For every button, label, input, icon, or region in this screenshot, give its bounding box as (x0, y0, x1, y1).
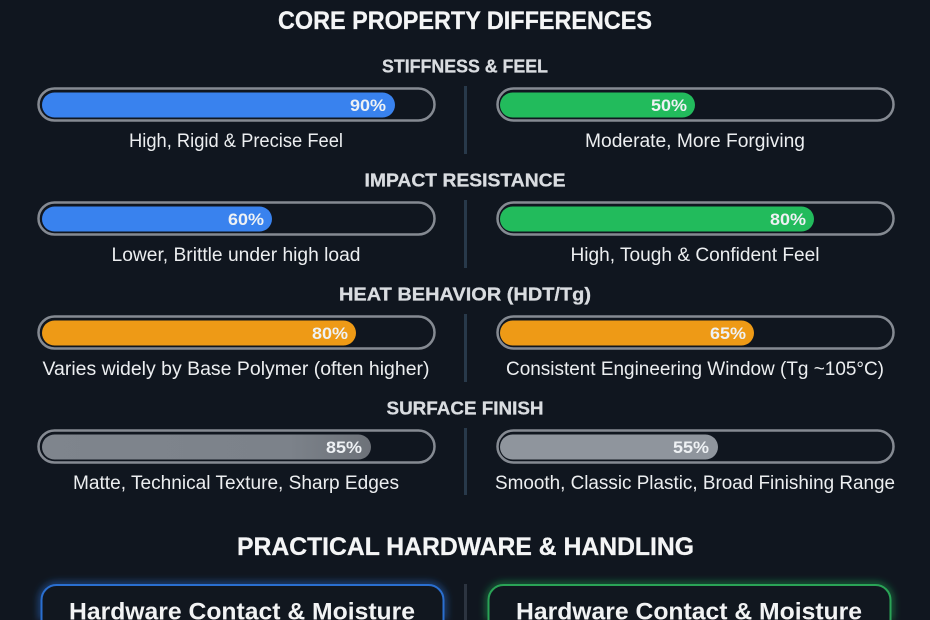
heading: practical hardware and handling: PRACTICAL HARDWARE & HANDLING (237, 533, 694, 561)
bar: right 55% (498, 430, 894, 462)
label: left: Lower, Brittle under high load (112, 245, 360, 266)
card: left hardware contact (42, 585, 444, 620)
bar: right 50%: 50% (651, 96, 687, 115)
panel: stiffness and feel (38, 56, 894, 154)
label: left: Varies widely by Base Polymer (often higher) (42, 359, 430, 380)
bar: left 90%: 90% (350, 96, 386, 115)
divider (464, 314, 467, 382)
bar: left 60% (38, 202, 434, 234)
bar: left 60%: 60% (228, 210, 264, 229)
label: left: Matte, Technical Texture, Sharp Edges (73, 473, 399, 494)
bar: right 80%: 80% (770, 210, 806, 229)
label: right: Consistent Engineering Window (Tg ~105°C) (506, 359, 884, 380)
divider (464, 86, 467, 154)
bar: left 85% (38, 430, 434, 462)
label: left: High, Rigid & Precise Feel (129, 131, 343, 152)
bar: left 85%: 85% (326, 438, 362, 457)
bar: left 80% (38, 316, 434, 348)
bar: right 65% (498, 316, 894, 348)
heading: stiffness: STIFFNESS & FEEL (382, 56, 548, 76)
heading: impact: IMPACT RESISTANCE (364, 170, 566, 190)
bar: right 55%: 55% (673, 438, 709, 457)
card: right hardware contact (488, 585, 890, 620)
panel: impact resistance (38, 170, 894, 268)
label: right: High, Tough & Confident Feel (570, 245, 820, 266)
bar: right 80% (498, 202, 894, 234)
bar: right 65%: 65% (710, 324, 746, 343)
panel: heat behavior (38, 284, 894, 382)
divider (464, 200, 467, 268)
panel: surface finish (38, 398, 895, 495)
bar: right 50% (498, 88, 894, 120)
heading: surface: SURFACE FINISH (386, 398, 544, 418)
label: right: Smooth, Classic Plastic, Broad Finishing Range (495, 473, 895, 494)
divider (464, 428, 467, 495)
bar: left 80%: 80% (312, 324, 348, 343)
title: CORE PROPERTY DIFFERENCES (278, 7, 652, 35)
label: right: Moderate, More Forgiving (585, 131, 805, 152)
bar: left 90% (38, 88, 434, 120)
heading: heat: HEAT BEHAVIOR (HDT/Tg) (339, 284, 591, 304)
divider (464, 584, 467, 620)
